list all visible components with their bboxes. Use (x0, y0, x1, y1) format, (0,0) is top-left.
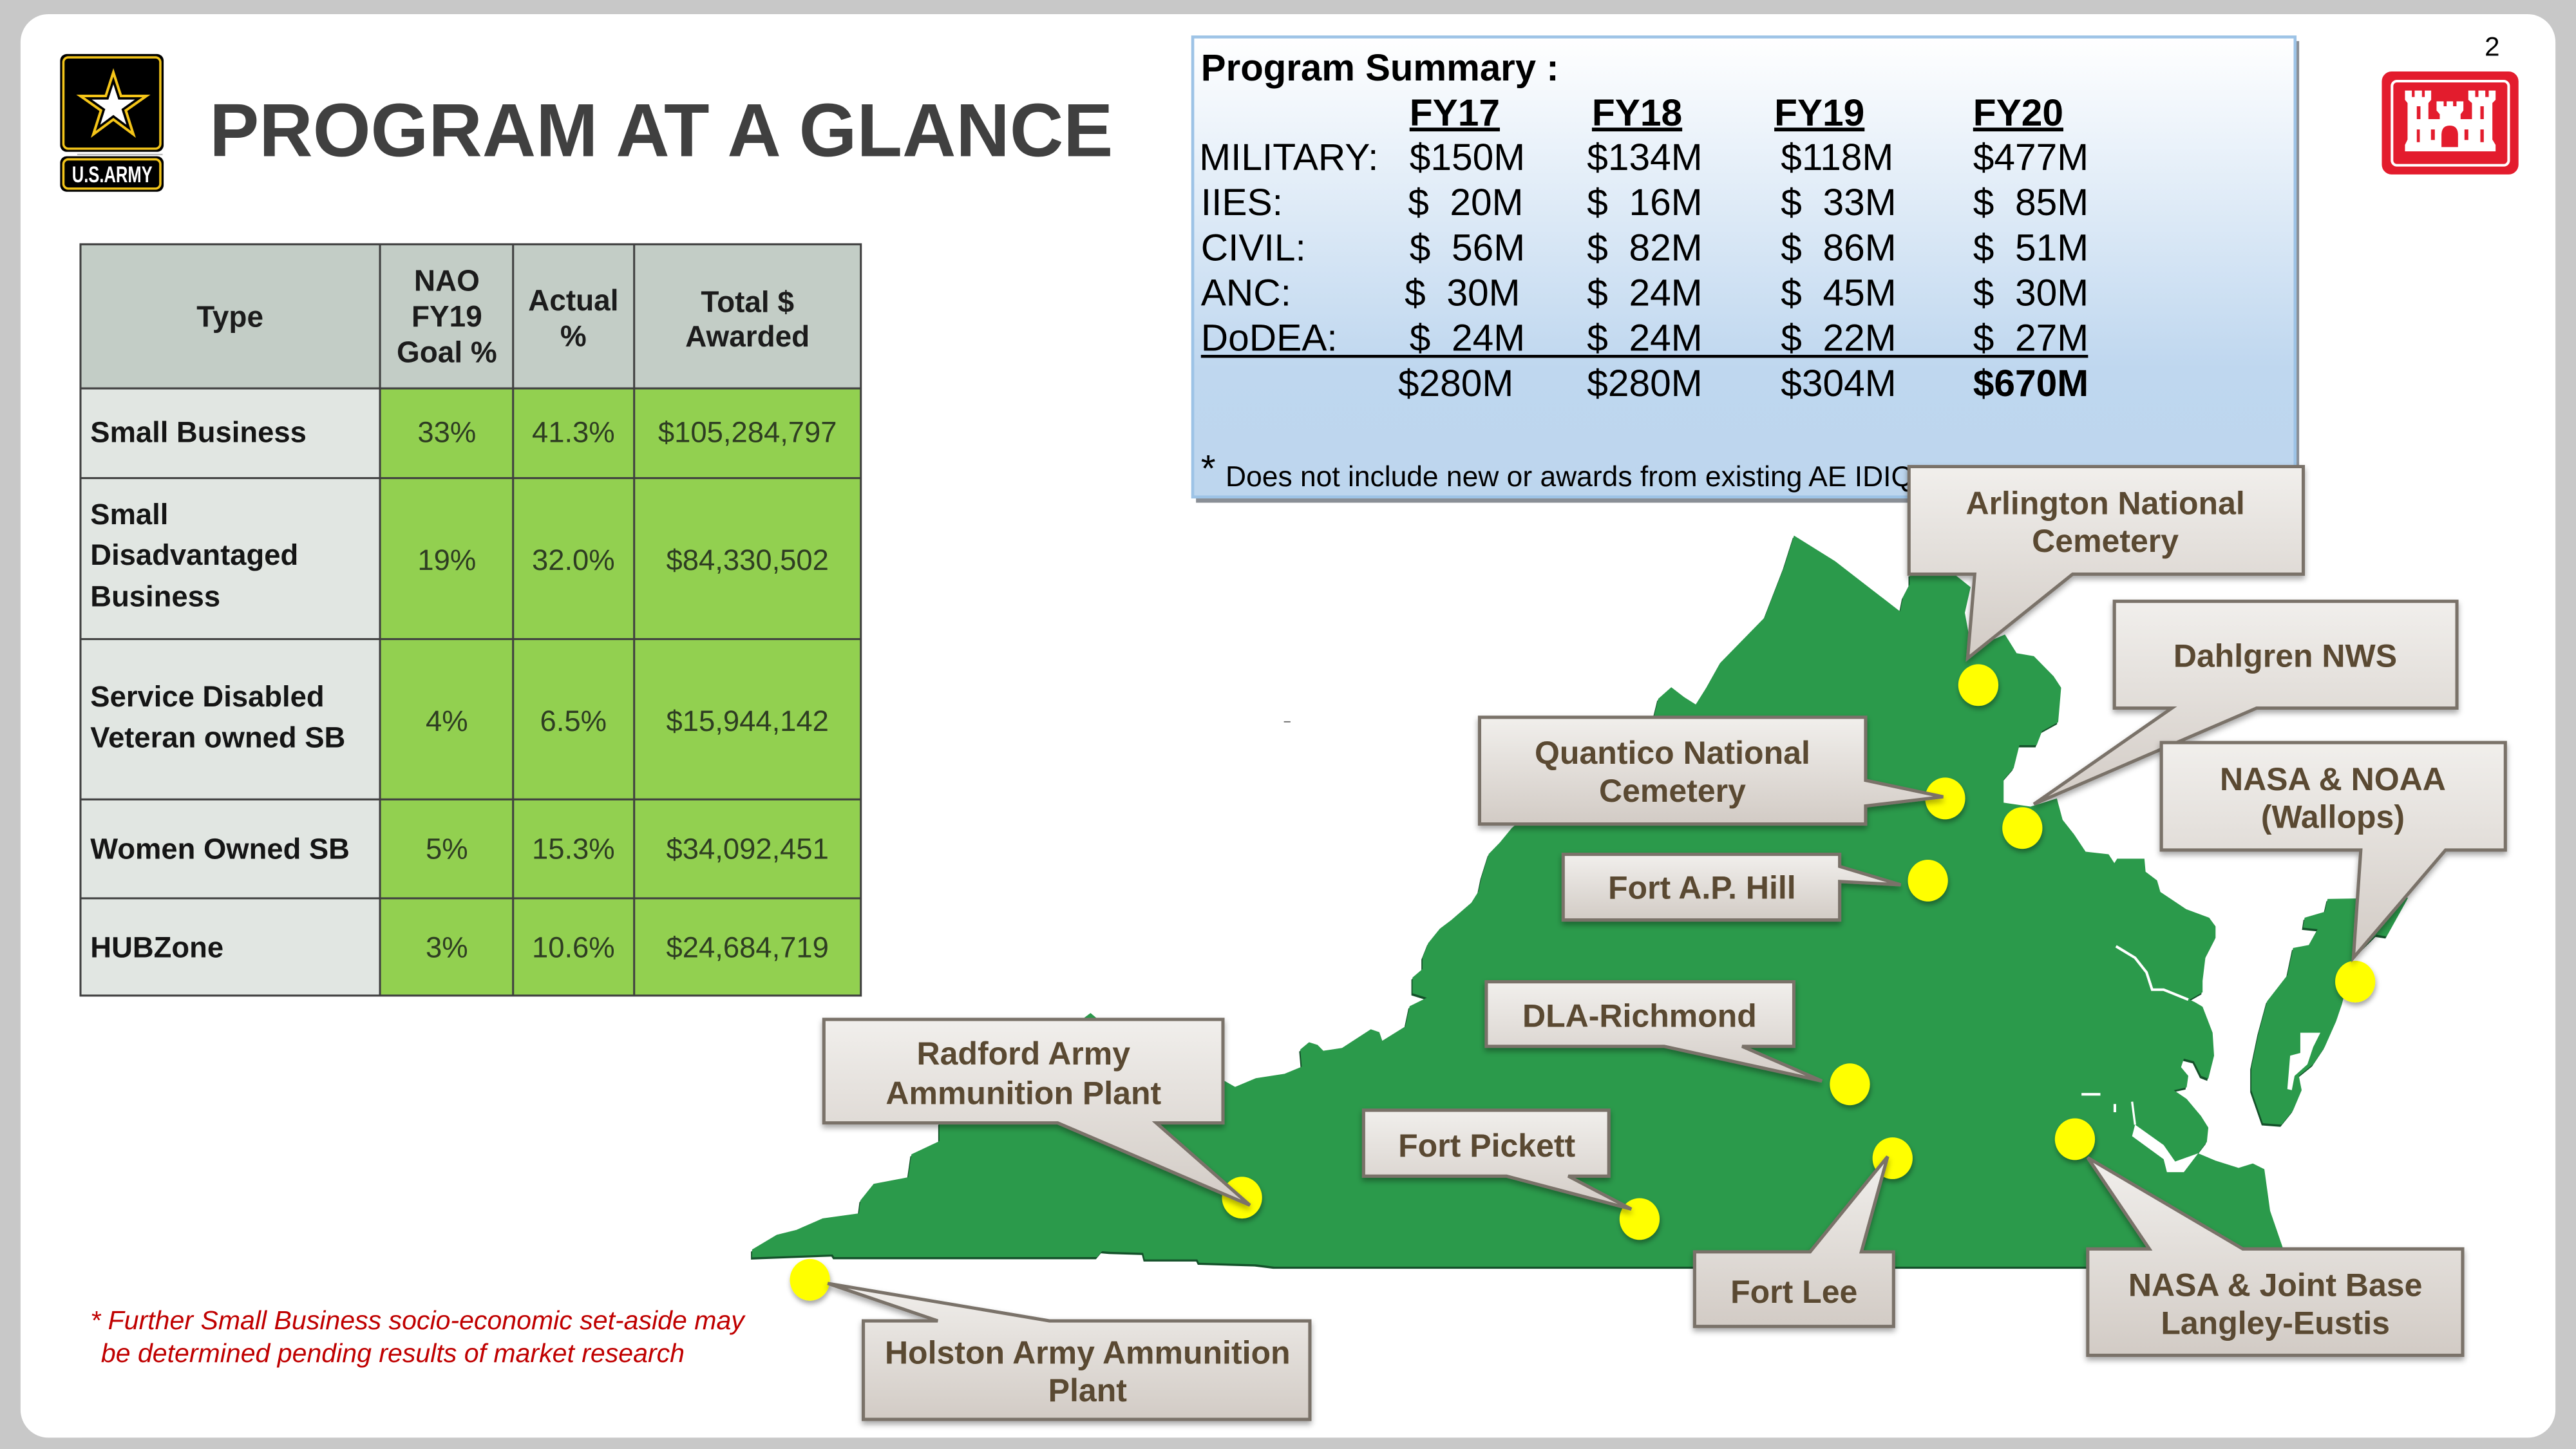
row: ANC: $ 45M (1781, 272, 1897, 314)
callout: Fort Pickett (1363, 1110, 1631, 1209)
row: small business: Small Business (90, 416, 307, 449)
row: civil: CIVIL: (1201, 227, 1306, 269)
callout: NASA and Joint Base Langley-Eustis: Langley-Eustis (2161, 1305, 2390, 1341)
row: DoDEA: $ 27M (1973, 317, 2088, 359)
row: totals (1398, 363, 2088, 404)
row: small disadvantaged business: Disadvantaged (90, 538, 298, 571)
callout: Holston Army Ammunition Plant (828, 1283, 1310, 1419)
note: set-aside footnote: * Further Small Business socio-economic set-aside may (90, 1305, 746, 1335)
row: military: $118M (1781, 137, 1893, 178)
row: IIES: $ 16M (1587, 182, 1703, 223)
row: hubzone: HUBZone (90, 931, 223, 963)
icon: U.S. Army logo: U.S.ARMY (72, 162, 153, 187)
row: women owned: $34,092,451 (667, 832, 829, 865)
row: small disadvantaged business (90, 498, 829, 612)
callout: Arlington National Cemetery (1909, 466, 2304, 658)
note: set-aside footnote: be determined pending results of market research (101, 1338, 685, 1368)
callout: Arlington National Cemetery: Arlington National (1965, 485, 2245, 521)
row: totals: $280M (1587, 363, 1703, 404)
callout: Radford Army Ammunition Plant: Ammunition Plant (886, 1075, 1162, 1111)
title: PROGRAM AT A GLANCE (209, 88, 1113, 172)
row: service disabled veteran: Veteran owned SB (90, 721, 345, 754)
fiscal year headers: FY19 (1774, 92, 1864, 134)
row: small disadvantaged business: Small (90, 498, 168, 531)
row: military: MILITARY: (1199, 137, 1378, 178)
small stray mark (1284, 721, 1291, 723)
row: ANC: $ 30M (1973, 272, 2088, 314)
row: service disabled veteran: $15,944,142 (667, 705, 829, 737)
row: small business: 41.3% (532, 416, 615, 449)
row: small disadvantaged business: $84,330,502 (667, 544, 829, 576)
row: women owned (90, 832, 829, 865)
row: small business: 33% (417, 416, 476, 449)
fiscal year headers: FY17 (1410, 92, 1500, 134)
row: civil: $ 86M (1781, 227, 1897, 269)
row: service disabled veteran: 6.5% (540, 705, 607, 737)
icon: U.S. Army logo (60, 54, 164, 192)
row: civil: $ 56M (1410, 227, 1525, 269)
callout: Radford Army Ammunition Plant (824, 1019, 1250, 1205)
row: hubzone: 3% (426, 931, 468, 963)
row: IIES: $ 85M (1973, 182, 2088, 223)
callout: NASA and Joint Base Langley-Eustis: NASA & Joint Base (2128, 1267, 2422, 1303)
row: service disabled veteran: Service Disabled (90, 680, 325, 713)
callout: Fort A.P. Hill: Fort A.P. Hill (1608, 869, 1796, 905)
callout: Radford Army Ammunition Plant: Radford Army (917, 1036, 1130, 1072)
row: service disabled veteran: 4% (426, 705, 468, 737)
callout: Holston Army Ammunition Plant: Holston Army Ammunition (885, 1334, 1291, 1370)
callout: DLA-Richmond: DLA-Richmond (1522, 998, 1757, 1034)
summary footnote (1201, 448, 1913, 493)
row: women owned: 5% (426, 832, 468, 865)
row: civil: $ 51M (1973, 227, 2088, 269)
row: ANC: $ 24M (1587, 272, 1703, 314)
row: hubzone: 10.6% (532, 931, 615, 963)
row: ANC: ANC: (1201, 272, 1291, 314)
row: IIES: $ 20M (1408, 182, 1524, 223)
callout: Dahlgren NWS (2034, 601, 2457, 804)
row: DoDEA: $ 24M (1410, 317, 1525, 359)
row: small disadvantaged business: 19% (417, 544, 476, 576)
callout: Fort A.P. Hill (1563, 855, 1901, 920)
table header row: Awarded (685, 319, 810, 353)
row: civil: $ 82M (1587, 227, 1703, 269)
row: DoDEA: $ 24M (1587, 317, 1703, 359)
table header row: % (560, 319, 587, 352)
row: civil (1201, 227, 2088, 269)
summary footnote: Does not include new or awards from existing AE IDIQ (1226, 461, 1913, 493)
location markers (790, 664, 2375, 1301)
callout: Fort Lee (1694, 1157, 1893, 1327)
row: small business: $105,284,797 (658, 416, 837, 449)
row: women owned: Women Owned SB (90, 832, 350, 865)
fiscal year headers: FY18 (1592, 92, 1682, 134)
table body fills (80, 388, 861, 996)
callout: NASA and NOAA Wallops: NASA & NOAA (2220, 761, 2446, 797)
table header row: FY19 (412, 299, 482, 333)
callout: NASA and NOAA Wallops (2161, 743, 2505, 958)
row: totals: $280M (1398, 363, 1513, 404)
row: small disadvantaged business: Business (90, 580, 220, 612)
row: military: $477M (1973, 137, 2088, 178)
row: military: $150M (1410, 137, 1525, 178)
note: set-aside footnote (90, 1305, 746, 1368)
map: Virginia (751, 536, 2408, 1269)
table grid lines (80, 244, 861, 996)
fiscal year headers: FY20 (1973, 92, 2063, 134)
callout: Dahlgren NWS: Dahlgren NWS (2174, 638, 2397, 674)
map: rivers and inlets (2081, 946, 2198, 1172)
table header row (80, 244, 861, 388)
fiscal year headers (1410, 92, 2063, 134)
row: IIES: IIES: (1201, 182, 1283, 223)
row: small business (90, 416, 837, 449)
row: IIES (1201, 182, 2088, 223)
row: DoDEA: DoDEA: (1201, 317, 1338, 359)
row: hubzone (90, 931, 829, 963)
table header row: NAO (414, 264, 480, 298)
row: service disabled veteran (90, 680, 829, 754)
page number: 2 (2485, 32, 2500, 62)
row: women owned: 15.3% (532, 832, 615, 865)
icon: Corps of Engineers castle (2382, 71, 2519, 175)
row: military: $134M (1587, 137, 1703, 178)
row: military (1199, 137, 2088, 178)
callout: Holston Army Ammunition Plant: Plant (1048, 1372, 1127, 1408)
table header row: Goal % (397, 336, 497, 369)
row: hubzone: $24,684,719 (667, 931, 829, 963)
panel: program summary: Program Summary : (1201, 47, 1559, 89)
callout: NASA and Joint Base Langley-Eustis (2088, 1158, 2463, 1356)
table header row: Total $ (701, 285, 794, 319)
row: small disadvantaged business: 32.0% (532, 544, 615, 576)
row: totals: $304M (1781, 363, 1897, 404)
panel: program summary (1193, 37, 2299, 503)
callout: Quantico National Cemetery: Quantico National (1535, 735, 1810, 771)
map: eastern shore (2251, 898, 2408, 1124)
table header row: Type (196, 300, 263, 334)
callout: Quantico National Cemetery (1479, 717, 1943, 824)
row: totals: $670M (1973, 363, 2088, 404)
row: IIES: $ 33M (1781, 182, 1897, 223)
callout: Quantico National Cemetery: Cemetery (1599, 773, 1746, 809)
row: ANC: $ 30M (1405, 272, 1520, 314)
callout: DLA-Richmond (1486, 981, 1822, 1081)
callout: Fort Lee: Fort Lee (1730, 1274, 1857, 1310)
row: DoDEA (1201, 317, 2088, 359)
summary footnote: * (1201, 448, 1216, 489)
callout: Fort Pickett: Fort Pickett (1398, 1128, 1576, 1164)
row: DoDEA: $ 22M (1781, 317, 1897, 359)
callout: NASA and NOAA Wallops: (Wallops) (2261, 799, 2405, 835)
row: ANC (1201, 272, 2088, 314)
callout: Arlington National Cemetery: Cemetery (2032, 523, 2179, 559)
table header row: Actual (528, 283, 618, 317)
table: small business goals (80, 244, 861, 996)
